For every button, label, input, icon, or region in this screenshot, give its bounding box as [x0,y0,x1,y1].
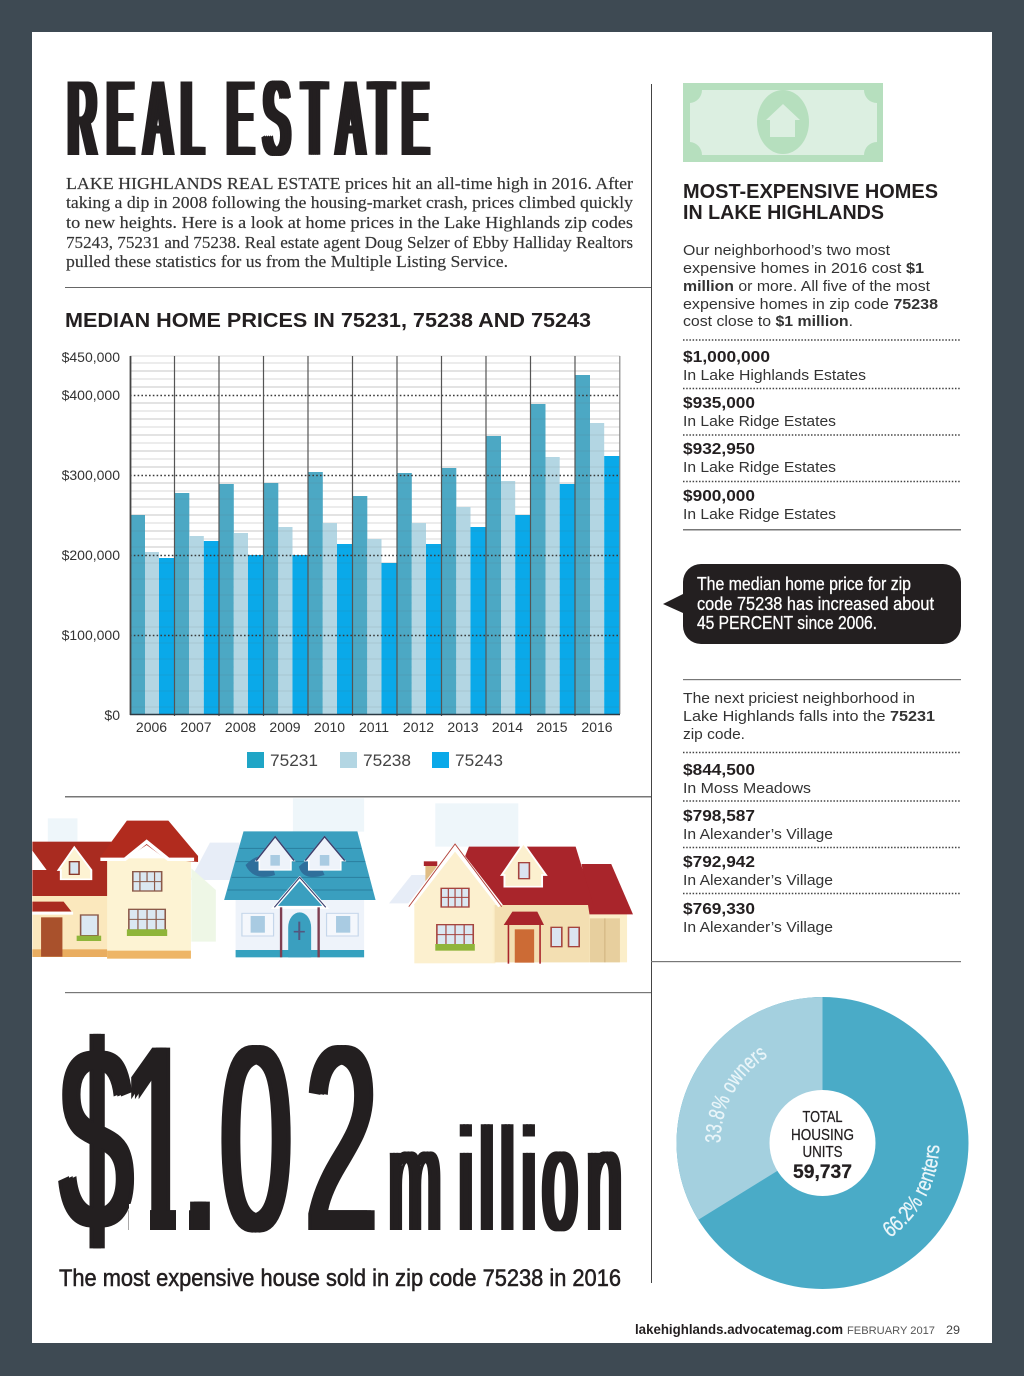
x axis years: 2007 [180,719,212,735]
title: REAL ESTATE [68,59,428,179]
y axis labels [62,349,120,723]
y axis labels: $0 [104,707,120,723]
big number caption: The most expensive house sold in zip code 75238 in 2016 [59,1265,621,1292]
paragraph: next priciest neighborhood: The next priciest neighborhood in [683,690,915,707]
list: top homes in 75231: In Alexander’s Village [683,826,833,843]
paragraph: most-expensive homes: expensive homes in zip code 75238 [683,296,938,313]
legend: 75231 [270,752,318,770]
paragraph: most-expensive homes: cost close to $1 million . [683,313,853,330]
center label [791,1109,854,1183]
callout [663,564,961,644]
list: top homes in 75231 [683,762,833,936]
icon: money bill with house [683,83,883,162]
list: top homes in 75231: In Moss Meadows [683,780,811,797]
intro text block: 75243, 75231 and 75238. Real estate agent Doug Selzer of Ebby Halliday Realtors [66,233,633,252]
y axis labels: $200,000 [62,547,120,563]
frame edge [0,790,32,990]
house 2: blue roof cottage [224,831,376,957]
big number: $1.02 million [61,991,622,1287]
list: top homes in 75231: $792,942 [683,854,755,871]
x axis years: 2010 [314,719,345,735]
center label: UNITS [802,1144,842,1161]
donut chart: housing units [676,997,968,1289]
list: top homes in 75231: $798,587 [683,808,755,825]
callout: 45 PERCENT since 2006. [697,613,877,633]
list: top homes in 75238: In Lake Ridge Estates [683,413,836,430]
list: top homes in 75238: In Lake Ridge Estates [683,506,836,523]
house 1: red roof terrace [32,821,198,959]
list: top homes in 75238: In Lake Ridge Estates [683,459,836,476]
heading: most-expensive homes: MOST-EXPENSIVE HOMES [683,181,938,203]
callout: The median home price for zip [697,574,911,594]
paragraph: most-expensive homes: million or more. All five of the most [683,278,931,295]
footer: FEBRUARY 2017 [847,1325,935,1337]
paragraph: most-expensive homes [683,242,938,330]
intro text block: LAKE HIGHLANDS REAL ESTATE prices hit an all-time high in 2016. After [66,174,633,193]
list: top homes in 75238: In Lake Highlands Estates [683,367,866,384]
center label: 59,737 [793,1162,852,1183]
x axis years: 2016 [581,719,613,735]
list: top homes in 75238 [683,349,866,523]
legend [247,752,503,770]
x axis years: 2008 [225,719,256,735]
label: owners: 33.8% owners [705,1048,767,1142]
chart heading: MEDIAN HOME PRICES IN 75231, 75238 AND 75243 [65,310,591,332]
paragraph: next priciest neighborhood [683,690,935,743]
footer: lakehighlands.advocatemag.com [635,1322,843,1337]
paragraph: next priciest neighborhood: Lake Highlands falls into the 75231 [683,708,935,725]
callout: code 75238 has increased about [697,594,934,614]
x axis years: 2012 [403,719,434,735]
list: top homes in 75231: In Alexander’s Village [683,872,833,889]
list: top homes in 75231: $769,330 [683,901,755,918]
center label: HOUSING [791,1127,854,1144]
legend: 75243 [455,752,503,770]
label: renters: 66.2% renters [883,1145,940,1236]
x axis years: 2014 [492,719,523,735]
bars for 75238 [145,423,604,714]
bars for 75243 [159,456,620,714]
heading: most-expensive homes: IN LAKE HIGHLANDS [683,202,884,224]
list: top homes in 75238: $1,000,000 [683,349,770,366]
paragraph: most-expensive homes: expensive homes in 2016 cost $1 [683,260,924,277]
list: top homes in 75238: $935,000 [683,395,755,412]
house illustrations [32,798,633,964]
y axis labels: $300,000 [62,467,120,483]
footer [635,1322,960,1337]
footer: 29 [946,1325,960,1337]
paragraph: most-expensive homes: Our neighborhood’s two most [683,242,891,259]
y axis labels: $450,000 [62,349,120,365]
x axis years [136,719,613,735]
center label: TOTAL [802,1109,843,1126]
y axis labels: $400,000 [62,387,120,403]
legend: 75238 [363,752,411,770]
x axis years: 2009 [269,719,301,735]
big number: $1.02 million: million [389,1097,622,1261]
y axis labels: $100,000 [62,627,120,643]
x axis years: 2013 [447,719,479,735]
background buildings [48,798,518,942]
list: top homes in 75238: $932,950 [683,441,755,458]
intro text block: to new heights. Here is a look at home prices in the Lake Highlands zip codes [66,213,633,232]
x axis years: 2011 [359,719,389,735]
x axis years: 2006 [136,719,167,735]
intro text block: taking a dip in 2008 following the housing-market crash, prices climbed quickly [66,193,634,212]
x axis years: 2015 [536,719,568,735]
big number: $1.02 million: $1.02 [61,991,377,1287]
list: top homes in 75231: In Alexander’s Village [683,919,833,936]
house 3: red roof home [409,843,633,964]
bar chart: median home prices [62,349,620,770]
paragraph: next priciest neighborhood: zip code. [683,726,745,743]
list: top homes in 75238: $900,000 [683,488,755,505]
heading: most-expensive homes [683,181,938,224]
list: top homes in 75231: $844,500 [683,762,755,779]
bars for 75231 [131,375,590,714]
intro text block [66,174,634,271]
intro text block: pulled these statistics for us from the Multiple Listing Service. [66,252,508,271]
